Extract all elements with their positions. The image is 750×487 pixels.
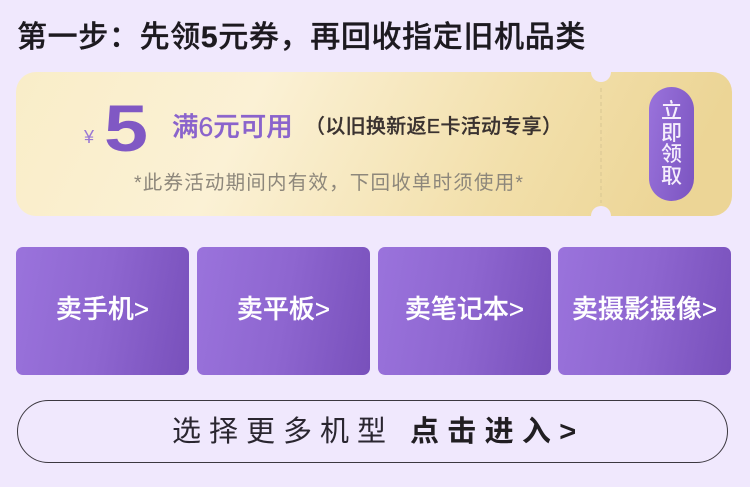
claim button: 即 bbox=[661, 122, 682, 144]
coupon amount: 5 bbox=[104, 91, 148, 165]
claim button bbox=[649, 87, 694, 201]
more models button bbox=[17, 400, 728, 463]
claim button: 立 bbox=[661, 100, 682, 123]
card: sell laptop: 卖笔记本> bbox=[405, 294, 524, 324]
panel: coupon ticket bbox=[16, 72, 732, 216]
card: sell camera bbox=[558, 247, 731, 375]
title: 第一步：先领5元券，再回收指定旧机品类 bbox=[17, 21, 586, 54]
button label: click to enter: 点击进入> bbox=[410, 416, 584, 448]
card: sell phone: 卖手机> bbox=[56, 294, 149, 324]
activity note: （以旧换新返E卡活动专享） bbox=[305, 116, 562, 138]
claim button: 领 bbox=[661, 143, 682, 166]
card: sell tablet bbox=[197, 247, 370, 375]
validity note: *此券活动期间内有效，下回收单时须使用* bbox=[134, 172, 524, 194]
usage threshold: 满6元可用 bbox=[172, 112, 293, 142]
button label: choose more models: 选择更多机型 bbox=[172, 416, 394, 448]
currency sign: ¥ bbox=[84, 127, 94, 147]
card: sell camera: 卖摄影摄像> bbox=[572, 294, 717, 324]
card: sell phone bbox=[16, 247, 189, 375]
claim button: 取 bbox=[661, 164, 682, 188]
card: sell laptop bbox=[378, 247, 551, 375]
card: sell tablet: 卖平板> bbox=[237, 294, 330, 324]
